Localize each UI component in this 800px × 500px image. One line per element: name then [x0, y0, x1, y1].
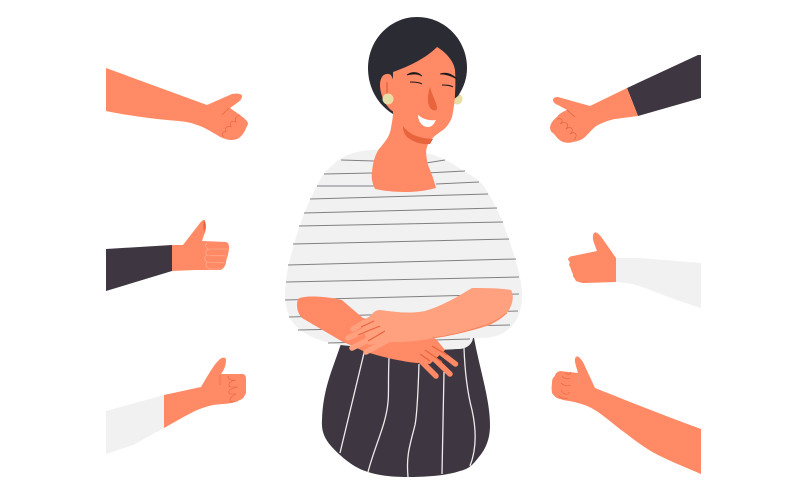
right earring	[452, 94, 462, 104]
closed eyes	[410, 82, 422, 84]
skirt	[322, 338, 490, 477]
ear	[380, 74, 394, 112]
nose	[428, 87, 437, 110]
white sleeve	[106, 395, 164, 454]
hand: middle right	[568, 232, 701, 308]
dark sleeve	[627, 55, 701, 116]
left earring	[382, 94, 394, 104]
smile	[418, 115, 436, 127]
upper arm with hand	[348, 288, 513, 352]
hand: middle left	[106, 220, 229, 291]
white sleeve	[616, 258, 701, 308]
hand: top right	[550, 55, 701, 143]
hair	[368, 17, 467, 114]
eyebrows	[407, 72, 422, 76]
hand: bottom left	[106, 358, 246, 454]
neck and face	[372, 47, 457, 192]
chin shadow	[403, 126, 433, 144]
fingers	[348, 316, 392, 352]
striped shirt	[285, 149, 522, 350]
fingers	[418, 343, 456, 376]
lower arm with hand	[297, 296, 456, 376]
dark sleeve	[106, 245, 172, 291]
hand: top left	[106, 68, 248, 140]
shirt stripes	[285, 160, 519, 343]
hand: bottom right	[552, 356, 701, 474]
